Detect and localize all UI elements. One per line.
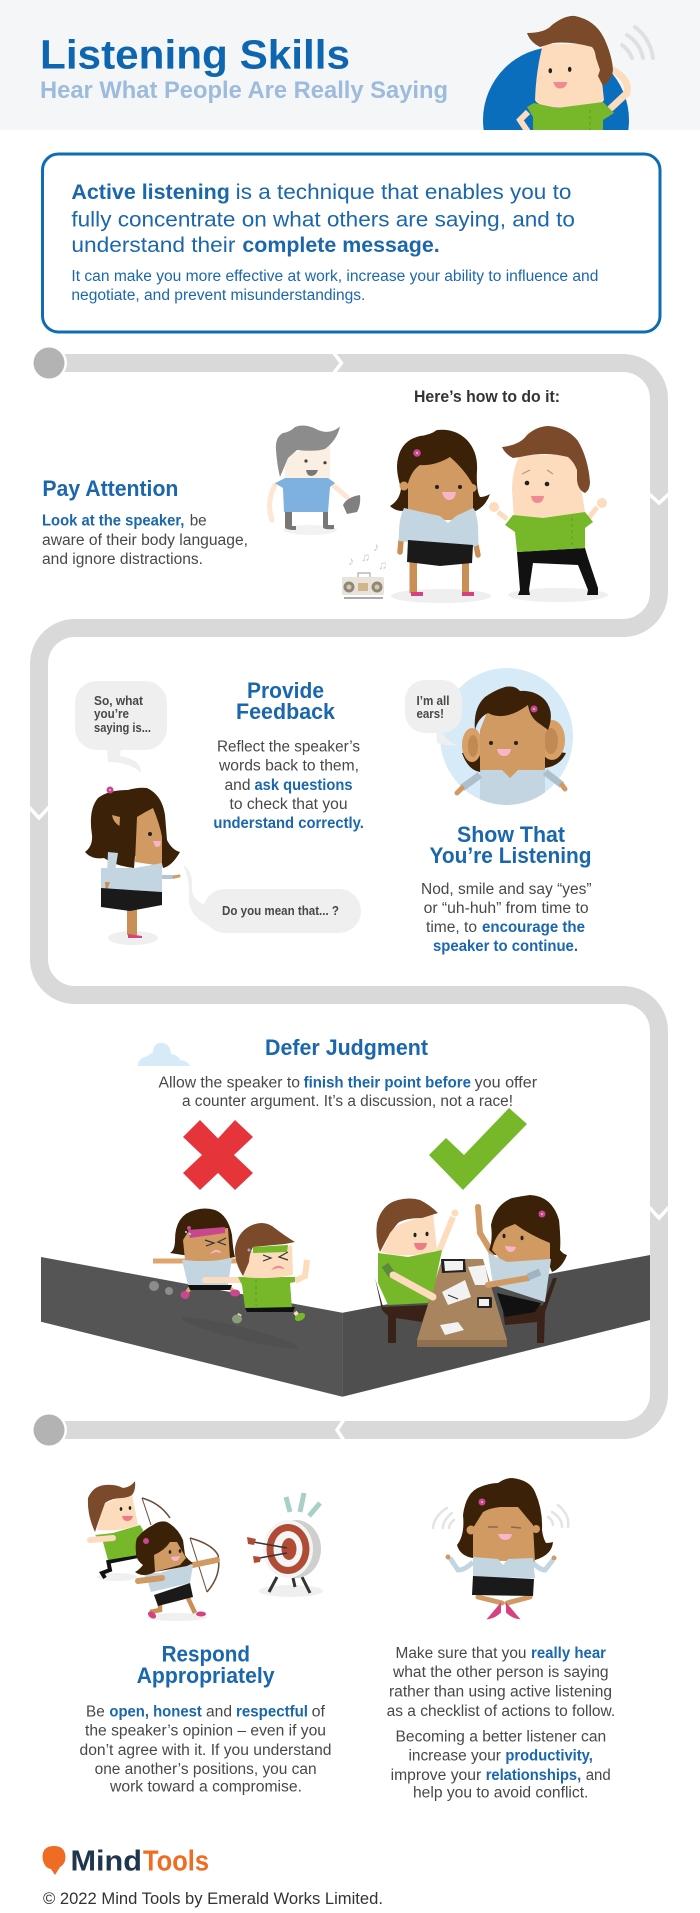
panel: intro definition: is a technique that enables you to	[236, 180, 571, 204]
callout: so what you're saying	[75, 681, 167, 773]
panel: defer judgment text: finish their point before	[304, 1074, 471, 1091]
logo: Mind Tools: Tools	[143, 1846, 209, 1878]
panel: respond appropriately text: and	[206, 1704, 232, 1721]
panel: respond appropriately text: the speaker’s opinion – even if you	[85, 1723, 326, 1740]
icon: arguing man running	[205, 1223, 307, 1324]
panel: provide feedback text: Provide	[247, 678, 324, 703]
icon: man archer	[88, 1481, 170, 1581]
callout: so what you're saying: saying is...	[94, 720, 151, 735]
panel: provide feedback text: and	[224, 777, 250, 794]
icon: woman in profile	[85, 786, 180, 945]
title: Listening Skills	[40, 32, 350, 78]
panel: respond appropriately text: don’t agree with it. If you understand	[80, 1742, 332, 1759]
panel: defer judgment text: Defer Judgment	[265, 1035, 429, 1060]
icon: target with arrows	[247, 1493, 323, 1597]
panel: show that you're listening text	[421, 822, 592, 955]
panel: defer judgment text	[158, 1035, 537, 1110]
panel: pay attention text: Pay Attention	[42, 476, 178, 501]
panel: defer judgment text: Allow the speaker to	[158, 1074, 300, 1091]
panel: pay attention text: Look at the speaker,	[42, 513, 184, 530]
icon: listening woman	[390, 430, 491, 603]
panel: really hear text: what the other person is saying	[392, 1664, 609, 1681]
icon: woman high-fiving at table	[478, 1195, 567, 1302]
icon: table with chairs	[375, 1259, 557, 1347]
icon: red cross	[183, 1120, 253, 1190]
panel: intro definition: understand their	[71, 233, 235, 257]
panel: pay attention text: be	[190, 513, 207, 530]
panel: really hear text: and	[586, 1767, 611, 1784]
icon: boombox and notes: ♫	[361, 550, 370, 564]
callout: I'm all ears: ears!	[416, 706, 444, 721]
panel: respond appropriately text: Be	[86, 1704, 105, 1721]
panel: really hear text: rather than using active listening	[389, 1684, 612, 1701]
panel: respond appropriately text: work toward a compromise.	[109, 1779, 302, 1796]
panel: show that you're listening text: You’re Listening	[430, 843, 592, 868]
heading: here's how: Here’s how to do it:	[414, 387, 560, 406]
panel: show that you're listening text: encourage the	[482, 919, 585, 936]
copyright: © 2022 Mind Tools by Emerald Works Limited.	[43, 1889, 383, 1908]
panel: show that you're listening text: or “uh-huh” from time to	[424, 900, 589, 917]
winding path	[28, 345, 670, 1448]
panel: defer judgment text: a counter argument. It’s a discussion, not a race!	[182, 1093, 513, 1110]
icon: dancing man	[489, 426, 608, 602]
panel: respond appropriately text: Respond	[162, 1642, 250, 1667]
panel: really hear text	[387, 1645, 615, 1802]
panel: really hear text: as a checklist of actions to follow.	[387, 1703, 615, 1720]
icon: green check	[429, 1108, 527, 1190]
icon: header man listening	[483, 16, 655, 130]
panel: pay attention text	[42, 476, 248, 568]
icon: boombox and notes: ♫	[378, 558, 387, 572]
panel: show that you're listening text: speaker to continue.	[433, 938, 578, 955]
panel: provide feedback text: Feedback	[236, 699, 336, 724]
panel: respond appropriately text: of	[312, 1704, 326, 1721]
panel: provide feedback text: ask questions	[254, 777, 352, 794]
panel: intro definition: It can make you more effective at work, increase your ability to influence and	[71, 268, 598, 285]
panel: really hear text: relationships,	[486, 1767, 581, 1784]
icon: boombox and notes	[342, 540, 387, 599]
panel: defer judgment text: you offer	[475, 1074, 537, 1091]
icon: arguing woman running	[149, 1208, 240, 1299]
panel: provide feedback text	[213, 678, 364, 832]
callout: do you mean that	[183, 864, 361, 933]
icon: boombox and notes: ♪	[348, 554, 354, 568]
panel: show that you're listening text: time, to	[426, 919, 477, 936]
subtitle: Hear What People Are Really Saying	[40, 77, 448, 104]
icon: boombox and notes: ♪	[373, 540, 379, 554]
panel: really hear text: increase your	[408, 1748, 501, 1765]
logo: Mind Tools: Mind	[70, 1846, 142, 1878]
panel: intro definition: Active listening	[71, 180, 230, 204]
icon: distracted grey man	[270, 426, 360, 535]
panel: provide feedback text: Reflect the speaker’s	[217, 739, 360, 756]
panel: respond appropriately text	[80, 1642, 332, 1796]
panel: intro definition: complete message.	[242, 233, 440, 257]
panel: intro definition: fully concentrate on what others are saying, and to	[71, 208, 575, 232]
panel: really hear text: help you to avoid conflict.	[413, 1785, 588, 1802]
panel: respond appropriately text: Appropriately	[137, 1663, 275, 1688]
floor: dark ground	[41, 1255, 650, 1397]
panel: provide feedback text: understand correctly.	[213, 815, 364, 832]
panel: really hear text: Becoming a better listener can	[396, 1729, 606, 1746]
panel: really hear text: productivity,	[505, 1748, 593, 1765]
panel: respond appropriately text: respectful	[236, 1704, 308, 1721]
panel: respond appropriately text: open, honest	[109, 1704, 202, 1721]
panel: show that you're listening text: Show That	[457, 822, 566, 847]
logo: Mind Tools	[42, 1846, 209, 1878]
header band	[0, 0, 700, 130]
callout: I'm all ears: I’m all	[416, 693, 450, 708]
panel: provide feedback text: to check that you	[230, 796, 348, 813]
panel: intro definition	[42, 154, 660, 332]
panel: intro definition: negotiate, and prevent misunderstandings.	[71, 287, 365, 304]
panel: pay attention text: aware of their body language,	[42, 532, 248, 549]
panel: respond appropriately text: one another’s positions, you can	[95, 1761, 317, 1778]
icon: meditating woman	[433, 1478, 568, 1618]
callout: I'm all ears	[405, 680, 462, 746]
callout: so what you're saying: So, what	[94, 693, 144, 708]
panel: pay attention text: and ignore distractions.	[42, 551, 203, 568]
callout: do you mean that: Do you mean that... ?	[222, 903, 339, 918]
icon: cloud	[138, 1043, 190, 1066]
panel: really hear text: Make sure that you	[396, 1645, 526, 1662]
panel: provide feedback text: words back to them,	[218, 758, 359, 775]
icon: woman archer	[135, 1521, 219, 1621]
panel: show that you're listening text: Nod, smile and say “yes”	[421, 881, 592, 898]
panel: really hear text: really hear	[531, 1645, 606, 1662]
icon: man high-fiving at table	[376, 1198, 458, 1305]
icon: woman with big ears	[440, 668, 573, 810]
panel: really hear text: improve your	[391, 1767, 481, 1784]
callout: so what you're saying: you’re	[94, 706, 129, 721]
